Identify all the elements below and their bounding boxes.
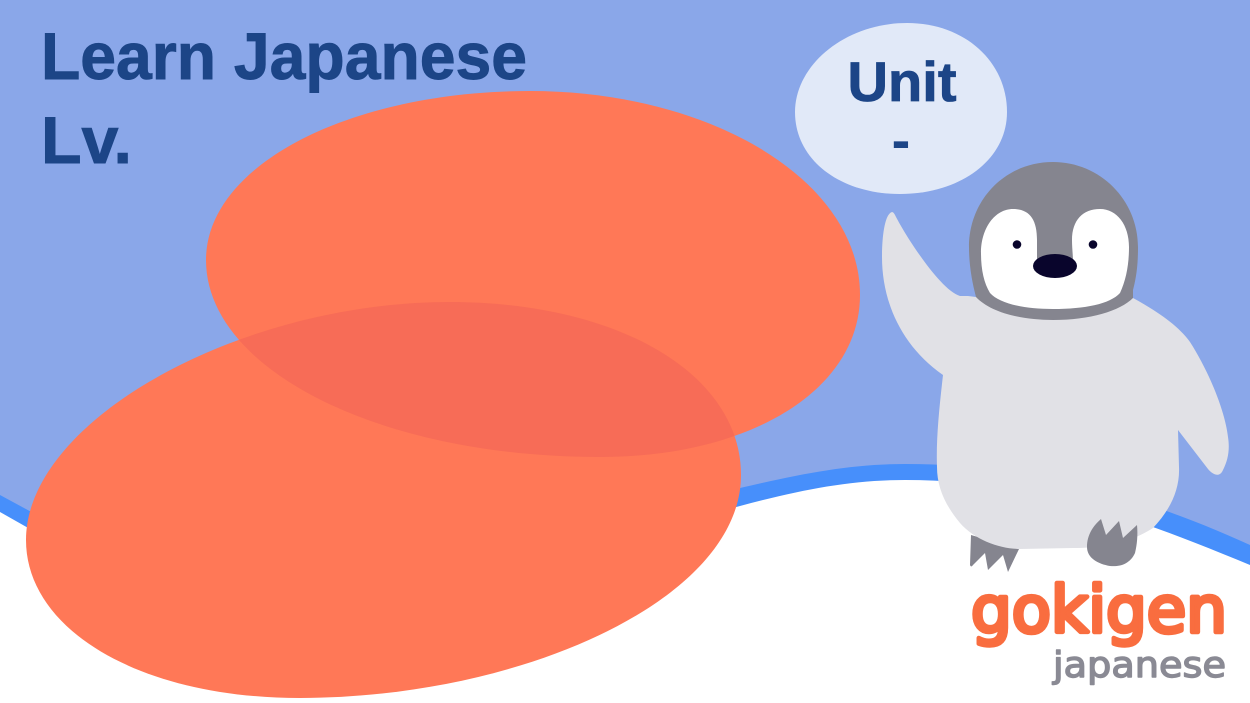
penguin eyes	[1013, 240, 1097, 249]
logo text: gokigen: gokigen	[971, 574, 1227, 648]
penguin beak	[1033, 254, 1077, 278]
penguin face	[981, 209, 1129, 309]
title	[41, 19, 527, 177]
snow hill	[0, 480, 1250, 703]
orange blob: bottom	[26, 302, 741, 698]
title: Learn Japanese	[41, 19, 527, 93]
blob overlap	[240, 302, 734, 457]
orange blob: top	[206, 91, 860, 457]
speech bubble	[795, 23, 1007, 194]
penguin right foot	[1087, 519, 1137, 566]
penguin body and flippers	[882, 212, 1229, 549]
penguin head	[969, 162, 1138, 320]
bubble text: Unit: Unit	[848, 50, 956, 113]
logo text: japanese: japanese	[1052, 645, 1226, 686]
logo	[971, 574, 1227, 686]
bubble text: dash: -	[892, 108, 910, 171]
penguin left foot	[970, 535, 1019, 572]
blue horizon stripe	[0, 464, 1250, 703]
penguin mascot	[882, 162, 1229, 572]
title: Lv.	[41, 103, 132, 177]
